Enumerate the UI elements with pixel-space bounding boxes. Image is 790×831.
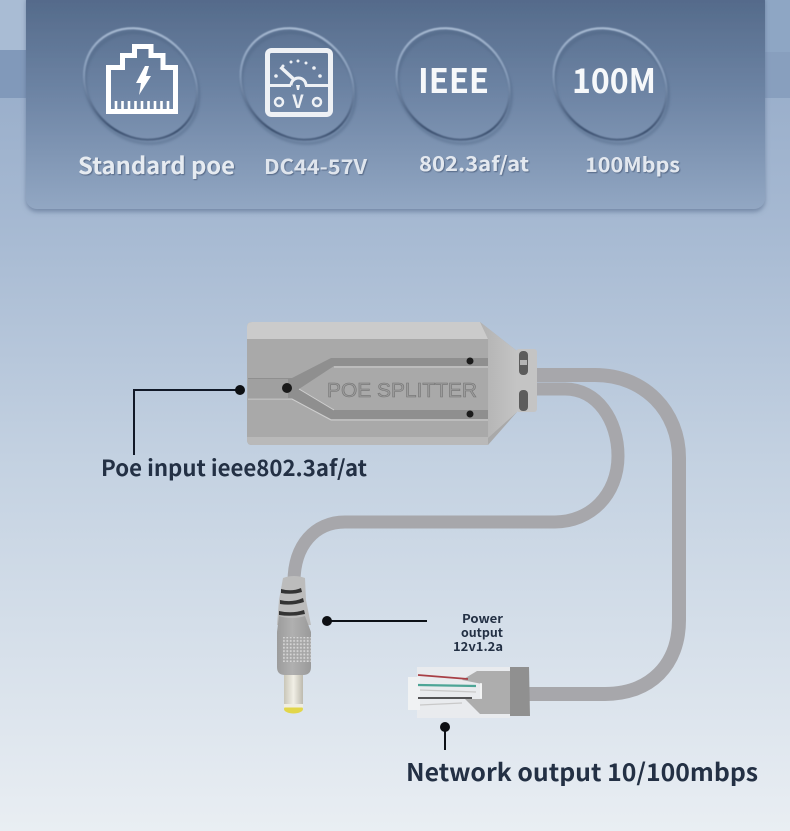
label: Standard poe bbox=[78, 147, 235, 181]
callout: poe input bbox=[101, 383, 367, 483]
diagram: poe splitter bbox=[247, 322, 679, 718]
splitter body bbox=[247, 322, 537, 445]
callout: network output bbox=[406, 722, 758, 788]
dc plug bbox=[277, 576, 311, 714]
icon: ring bbox=[218, 5, 378, 166]
callout: power output: 12v1.2a bbox=[453, 636, 503, 655]
label: DC44-57V bbox=[264, 151, 368, 180]
callout: poe input: Poe input ieee802.3af/at bbox=[101, 451, 367, 483]
small dots bbox=[466, 358, 474, 364]
ieee text: IEEE bbox=[418, 54, 489, 103]
icon: ring bbox=[531, 5, 691, 166]
cable: power bbox=[294, 389, 618, 582]
icon: ethernet port with bolt bbox=[108, 46, 176, 112]
icon: voltmeter: V bbox=[291, 88, 304, 114]
100M text: 100M bbox=[572, 54, 656, 103]
panel: feature strip bbox=[26, 0, 765, 209]
rj45 plug bbox=[408, 667, 530, 718]
callout: power output: output bbox=[461, 624, 503, 641]
icon: voltmeter bbox=[268, 50, 330, 114]
callout: power output bbox=[322, 610, 504, 655]
icon: ring bbox=[374, 5, 534, 166]
feature: ieee standard bbox=[374, 5, 534, 177]
cable: network bbox=[528, 375, 679, 694]
embossed name: POE SPLITTER bbox=[327, 379, 477, 402]
label: 100Mbps bbox=[585, 149, 680, 178]
label: 802.3af/at bbox=[419, 148, 530, 177]
groove bbox=[248, 358, 488, 419]
feature: voltage range bbox=[218, 5, 378, 180]
callout: power output: Power bbox=[462, 610, 504, 627]
icon: ring bbox=[61, 5, 221, 166]
callout: network output: Network output 10/100mbps bbox=[406, 753, 758, 788]
collar bbox=[516, 349, 537, 412]
feature: speed bbox=[531, 5, 691, 178]
feature: standard poe bbox=[61, 5, 235, 181]
